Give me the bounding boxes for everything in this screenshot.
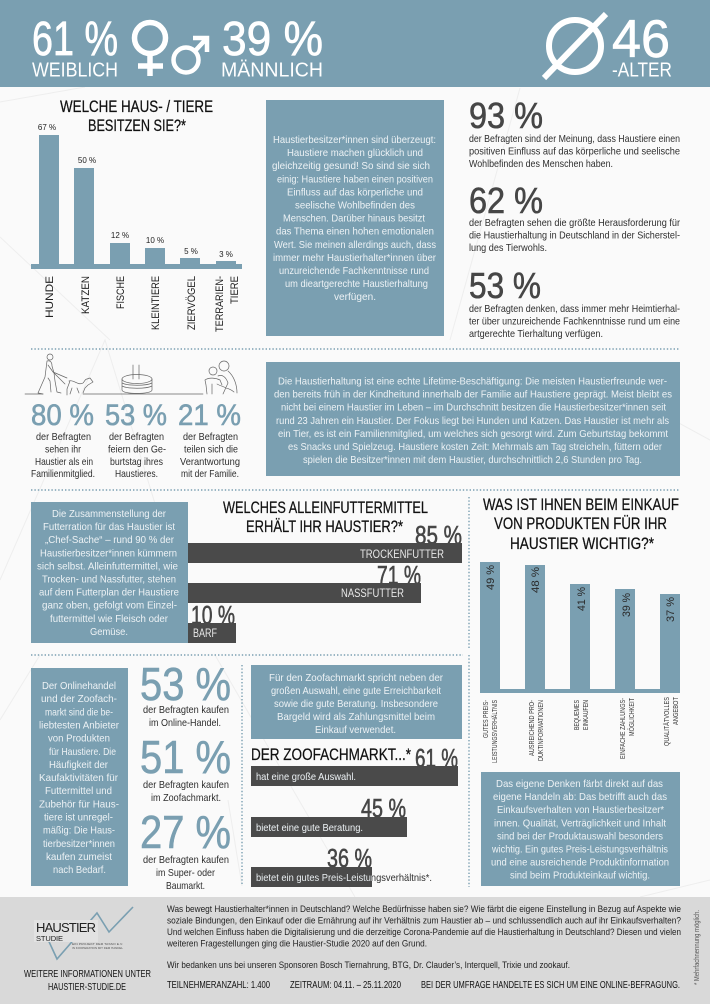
category labels: TERRARIEN- xyxy=(214,276,226,332)
stat: 53 percent birthday: Haustieres. xyxy=(115,468,158,480)
logo: Haustier-Studie: STUDIE xyxy=(36,934,63,943)
stat: 51 percent pet shop: der Befragten kaufen xyxy=(143,779,229,791)
panel: online retail: kaufen zumeist xyxy=(46,851,112,863)
panel: own thinking shapes purchases: sind beim Produkteinkauf wichtig. xyxy=(510,870,650,882)
heading: VON PRODUKTEN FÜR IHR xyxy=(494,514,667,533)
panel: own thinking shapes purchases: und eine ausreichende Produktinformation xyxy=(491,857,669,869)
category labels xyxy=(483,696,680,763)
stat: 62 percent: der Befragten sehen die größte Herausforderung für xyxy=(469,217,680,229)
average age: 46 xyxy=(612,10,670,69)
heading: DER ZOOFACHMARKT...* xyxy=(251,745,411,764)
category labels: TIERE xyxy=(229,276,241,304)
panel: owners conviction: Wert. Sie meinen allerdings auch, dass xyxy=(274,239,436,251)
stat: 80 percent family member: Haustier als ein xyxy=(35,456,93,468)
panel: lifetime occupation: spielen die Besitzer*innen mit dem Haustier, durchschnittlich 2,6 Stunden pro Tag. xyxy=(303,454,642,466)
panel: online retail: Kaufaktivitäten für xyxy=(39,772,118,784)
category labels: HUNDE xyxy=(44,276,56,318)
bar: barf: BARF xyxy=(193,626,217,640)
panel: own thinking shapes purchases: sind bei der Produktauswahl besonders xyxy=(497,830,663,842)
bar: value for money: bietet ein gutes Preis-Leistungsverhältnis*. xyxy=(256,872,432,884)
bar chart: pets owned xyxy=(31,97,242,332)
stat: 27 percent hardware store: der Befragten kaufen xyxy=(143,854,229,866)
bar chart: purchase criteria xyxy=(480,495,680,763)
stat: 53 percent xyxy=(469,265,680,340)
category labels: EINFACHE ZAHLUNGS- xyxy=(620,697,627,759)
panel: own thinking shapes purchases: Das eigene Denken färbt direkt auf das xyxy=(496,778,663,790)
category labels: KLEINTIERE xyxy=(150,276,162,330)
stat: 62 percent: die Haustierhaltung in Deutschland in der Sicherstel- xyxy=(469,230,680,242)
category labels: QUALITÄTVOLLES xyxy=(663,697,671,746)
panel: feeding: ganz oben, gefolgt vom Einzel- xyxy=(42,600,177,612)
panel: own thinking shapes purchases: wichtig. Ein gutes Preis-Leistungsverhältnis xyxy=(491,844,668,856)
panel: feeding: Gemüse. xyxy=(90,626,128,638)
bar: wet food xyxy=(188,560,421,603)
panel: online retail: für Haustiere. Die xyxy=(49,746,116,758)
panel: pet shop: Einkauf verwendet. xyxy=(315,724,396,736)
category labels: EINKAUFEN xyxy=(583,700,590,730)
footer band xyxy=(0,897,710,1004)
panel: owners conviction: Haustierbesitzer*innen sind überzeugt: xyxy=(273,134,436,146)
heading: WELCHES ALLEINFUTTERMITTEL xyxy=(223,498,428,517)
stat: 93 percent: 93 % xyxy=(469,95,543,136)
panel: owners conviction: einig: Haustiere haben einen positiven xyxy=(277,173,433,185)
panel: owners conviction: Haustiere machen glücklich und xyxy=(287,147,423,159)
bar: selection xyxy=(251,743,458,786)
logo: Haustier-Studie: EIN PROJEKT DER TASSO E.V. xyxy=(72,943,123,946)
stat: 53 percent birthday xyxy=(105,399,167,480)
panel: owners conviction: unzureichende Fachkenntnisse rund xyxy=(279,265,429,277)
panel: feeding: futtermittel wie Fleisch oder xyxy=(50,613,168,625)
stat: 27 percent hardware store: im Super- oder xyxy=(156,867,215,879)
category labels: LEISTUNGSVERHÄLTNIS xyxy=(491,700,499,763)
value labels: 41 % xyxy=(576,587,588,611)
bar chart: pet shop qualities xyxy=(251,743,458,887)
male share: 39 % xyxy=(222,13,323,66)
panel: pet shop: großen Auswahl, eine gute Erreichbarkeit xyxy=(271,685,441,697)
panel: own thinking shapes purchases: innen. Qualität, Verträglichkeit und Inhalt xyxy=(494,817,666,829)
value labels: 37 % xyxy=(665,597,677,622)
panel: lifetime occupation: den bereits früh in der Kindheitund innerhalb der Familie auf Haustiere geprägt. Meist bleibt es xyxy=(274,389,672,401)
value labels: 12 % xyxy=(111,231,129,240)
panel: online retail: markt sind die be- xyxy=(45,706,113,718)
category labels xyxy=(44,276,241,332)
female share xyxy=(32,13,118,82)
stat: 21 percent responsibility: Verantwortung xyxy=(180,456,240,468)
panel: lifetime occupation: es Snacks und Spielzeug. Haustiere kosten Zeit: Mehrmals am Tag streicheln, füttern oder xyxy=(288,441,662,453)
male share: MÄNNLICH xyxy=(221,60,323,82)
panel: owners conviction: verfügen. xyxy=(334,291,376,303)
panel: lifetime occupation: rund 23 Jahren ein Haustier. Der Fokus liegt bei Hunden und Katzen. Das Haustier ist mehr als xyxy=(276,415,669,427)
icon: birthday cake xyxy=(122,365,152,393)
illustration: line art of owner with dog, cake and family xyxy=(25,354,237,395)
panel: feeding xyxy=(31,502,188,643)
panel: online retail: tierbesitzer*innen xyxy=(43,838,115,850)
icon: female symbol xyxy=(134,22,166,76)
panel: feeding: auf dem Futterplan der Haustiere xyxy=(39,587,179,599)
stat: 62 percent xyxy=(469,180,680,254)
stat: 21 percent responsibility xyxy=(178,399,241,480)
stat: 27 percent hardware store xyxy=(140,806,231,892)
panel: feeding: Trocken- und Nassfutter, stehen xyxy=(42,574,176,586)
category labels: ZIERVÖGEL xyxy=(186,276,198,330)
category labels: KATZEN xyxy=(80,276,92,314)
category labels: MÖGLICHKEIT xyxy=(628,697,636,736)
bar: value for money: bietet ein gutes Preis-Leistungsverhältnis*. xyxy=(256,872,432,884)
category labels: FISCHE xyxy=(115,276,127,309)
panel: owners conviction xyxy=(266,100,444,336)
panel: owners conviction: um dieartgerechte Haustierhaltung xyxy=(285,278,428,290)
average age: -ALTER xyxy=(612,60,672,82)
study description: weiteren Fragestellungen ging die Haustier-Studie 2020 auf den Grund. xyxy=(166,938,427,950)
panel: lifetime occupation xyxy=(266,362,680,476)
category labels: ANGEBOT xyxy=(673,696,680,725)
panel: online retail: Häufigkeit der xyxy=(49,759,108,771)
bar: dry food: 85 % xyxy=(415,520,462,550)
icon: owner hugging pet xyxy=(205,361,237,394)
bar: barf xyxy=(188,600,236,643)
panel: own thinking shapes purchases xyxy=(481,772,680,886)
stat: 53 percent online: 53 % xyxy=(140,658,231,710)
panel: feeding: Die Zusammenstellung der xyxy=(52,508,166,520)
stat: 80 percent family member: der Befragten xyxy=(36,431,91,443)
logo: Haustier-Studie xyxy=(34,907,133,959)
stat: 21 percent responsibility: teilen sich die xyxy=(184,444,238,456)
stat: 80 percent family member: sehen ihr xyxy=(45,444,81,456)
category labels: DUKTINFORMATIONEN xyxy=(538,700,545,761)
survey facts: ZEITRAUM: 04.11. – 25.11.2020 xyxy=(290,980,401,991)
value labels: 48 % xyxy=(530,567,542,593)
average age xyxy=(544,10,672,82)
panel: feeding: „Chef-Sache“ – rund 90 % der xyxy=(45,534,174,546)
stat: 93 percent: positiven Einfluss auf das körperliche und seelische xyxy=(469,146,680,158)
panel: online retail: von Produkten xyxy=(48,733,110,745)
bar: advice: 45 % xyxy=(361,793,406,823)
heading xyxy=(60,97,213,135)
stat: 62 percent: 62 % xyxy=(469,180,543,221)
panel: feeding: Futterration für das Haustier ist xyxy=(43,521,175,533)
value labels: 50 % xyxy=(78,156,96,165)
bar: value for money: 36 % xyxy=(327,843,372,873)
stat: 51 percent pet shop: im Zoofachmarkt. xyxy=(151,792,221,804)
header band xyxy=(0,0,710,87)
panel: feeding: sich selbst. Alleinfuttermittel, wie xyxy=(37,560,178,572)
bar: barf: 10 % xyxy=(191,600,235,630)
stat: 53 percent: 53 % xyxy=(469,265,541,306)
value labels: 10 % xyxy=(146,236,164,245)
female share: 61 % xyxy=(32,13,118,66)
logo: Haustier-Studie: IN KOOPERATION MIT DEM HANDEL xyxy=(72,947,124,950)
heading: WELCHE HAUS- / TIERE xyxy=(60,97,213,116)
value labels: 39 % xyxy=(621,593,633,617)
stat: 53 percent birthday: burtstag ihres xyxy=(110,456,163,468)
bar: selection: 61 % xyxy=(415,743,458,773)
footnote: * Mehrfachnennung möglich. xyxy=(692,910,701,985)
stat: 53 percent birthday: feiern den Ge- xyxy=(108,444,166,456)
category labels: BEQUEMES xyxy=(574,700,581,730)
survey facts xyxy=(167,980,680,991)
panel: owners conviction: gleichzeitig gesund! So sind sie sich xyxy=(272,160,430,172)
bar: wet food: NASSFUTTER xyxy=(341,586,404,600)
panel: pet shop: Bargeld wird als Zahlungsmittel beim xyxy=(277,711,435,723)
stat: 80 percent family member: 80 % xyxy=(31,399,94,432)
panel: own thinking shapes purchases: Einkaufsverhalten von Haustierbesitzer* xyxy=(497,804,664,816)
panel: online retail: mäßig: Die Haus- xyxy=(43,825,115,837)
stat: 93 percent: Wohlbefinden des Menschen haben. xyxy=(469,158,613,170)
category labels: AUSREICHEND PRO- xyxy=(529,699,536,756)
bar: advice xyxy=(251,793,407,837)
study description xyxy=(166,904,681,971)
stat: 53 percent birthday: der Befragten xyxy=(109,431,164,443)
panel: online retail: nach Bedarf. xyxy=(53,864,106,876)
bars xyxy=(480,562,680,693)
stat: 21 percent responsibility: der Befragten xyxy=(183,431,238,443)
heading: HAUSTIER WICHTIG?* xyxy=(510,534,654,553)
panel: lifetime occupation: nicht bei einem Haustier im Leben – im Durchschnitt besitzen die Haustierbesitzer*innen seit xyxy=(281,402,666,414)
heading: BESITZEN SIE?* xyxy=(88,116,186,135)
more information link: HAUSTIER-STUDIE.DE xyxy=(48,981,126,993)
panel: pet shop: Für den Zoofachmarkt spricht neben der xyxy=(269,672,443,684)
icon: person walking dog xyxy=(38,354,93,395)
study description: Wir bedanken uns bei unseren Sponsoren Bosch Tiernahrung, BTG, Dr. Clauder’s, Interquell, Trixie und zookauf. xyxy=(167,960,570,971)
survey facts: TEILNEHMERANZAHL: 1.400 xyxy=(167,980,270,991)
panel: online retail: tiere ist unregel- xyxy=(44,812,113,824)
panel: online retail xyxy=(31,668,128,886)
bar: value for money xyxy=(251,848,432,887)
panel: feeding: Haustierbesitzer*innen kümmern xyxy=(40,547,177,559)
stat: 51 percent pet shop: 51 % xyxy=(140,731,231,783)
more information link: WEITERE INFORMATIONEN UNTER xyxy=(24,968,151,980)
heading xyxy=(223,498,428,536)
panel: pet shop xyxy=(251,665,462,739)
stat: 93 percent xyxy=(469,95,680,170)
female share: WEIBLICH xyxy=(32,60,118,82)
stat: 53 percent: artgerechte Tierhaltung verfügen. xyxy=(469,328,603,340)
value labels xyxy=(38,123,233,259)
stat: 27 percent hardware store: Baumarkt. xyxy=(166,880,205,892)
icon: male symbol xyxy=(174,38,207,72)
more information link xyxy=(24,968,151,993)
heading xyxy=(483,495,679,553)
panel: online retail: und der Zoofach- xyxy=(41,693,117,705)
stat: 21 percent responsibility: 21 % xyxy=(178,399,241,432)
panel: owners conviction: Menschen. Darüber hinaus besitzt xyxy=(283,213,425,225)
heading: ERHÄLT IHR HAUSTIER?* xyxy=(246,517,403,536)
bar chart: complete pet food xyxy=(188,498,462,643)
panel: lifetime occupation: ein Tier, es ist ein Familienmitglied, um welches sich gesorgt wird. Zum Geburtstag bekommt xyxy=(278,428,668,440)
bar: dry food xyxy=(188,520,462,563)
panel: owners conviction: Einfluss auf das körperliche und xyxy=(287,186,423,198)
stat: 51 percent pet shop xyxy=(140,731,231,804)
stat: 80 percent family member: Familienmitglied. xyxy=(31,468,95,480)
stat: 27 percent hardware store: 27 % xyxy=(140,806,231,858)
panel: owners conviction: seelische Wohlbefinden des xyxy=(295,200,415,212)
stat: 80 percent family member xyxy=(31,399,95,480)
stat: 53 percent online: im Online-Handel. xyxy=(149,717,221,729)
stat: 53 percent online: der Befragten kaufen xyxy=(143,704,229,716)
stat: 21 percent responsibility: mit der Familie. xyxy=(181,468,239,480)
panel: online retail: Zubehör für Haus- xyxy=(39,798,119,810)
bar: dry food: TROCKENFUTTER xyxy=(360,547,444,561)
value labels: 49 % xyxy=(485,565,497,590)
value labels: 3 % xyxy=(219,250,233,259)
bar: wet food: 71 % xyxy=(377,560,421,590)
bars xyxy=(31,135,242,269)
logo: Haustier-Studie: HAUSTIER xyxy=(36,920,96,935)
panel: online retail: Futtermittel und xyxy=(45,785,112,797)
bar: selection: hat eine große Auswahl. xyxy=(256,771,356,783)
stat: 53 percent online xyxy=(140,658,231,729)
stat: 53 percent birthday: 53 % xyxy=(105,399,167,432)
panel: online retail: Der Onlinehandel xyxy=(42,680,116,692)
value labels: 67 % xyxy=(38,123,56,132)
panel: own thinking shapes purchases: eigene Handeln ab: Das betrifft auch das xyxy=(493,791,667,803)
panel: lifetime occupation: Die Haustierhaltung ist eine echte Lifetime-Beschäftigung: Die meisten Haustierfreunde wer- xyxy=(278,376,667,388)
panel: owners conviction: immer mehr Haustierhalter*innen über xyxy=(273,252,436,264)
bar: advice: bietet eine gute Beratung. xyxy=(256,822,363,834)
panel: pet shop: sowie die gute Beratung. Insbesondere xyxy=(274,698,438,710)
panel: owners conviction: das Thema einen hohen emotionalen xyxy=(276,226,434,238)
value labels xyxy=(485,565,677,622)
stat: 62 percent: lung des Tierwohls. xyxy=(469,242,547,254)
category labels: GUTES PREIS- xyxy=(483,699,490,738)
value labels: 5 % xyxy=(184,247,198,256)
stat: 53 percent: der Befragten denken, dass immer mehr Heimtierhal- xyxy=(469,303,680,315)
panel: online retail: liebtesten Anbieter xyxy=(39,719,119,731)
